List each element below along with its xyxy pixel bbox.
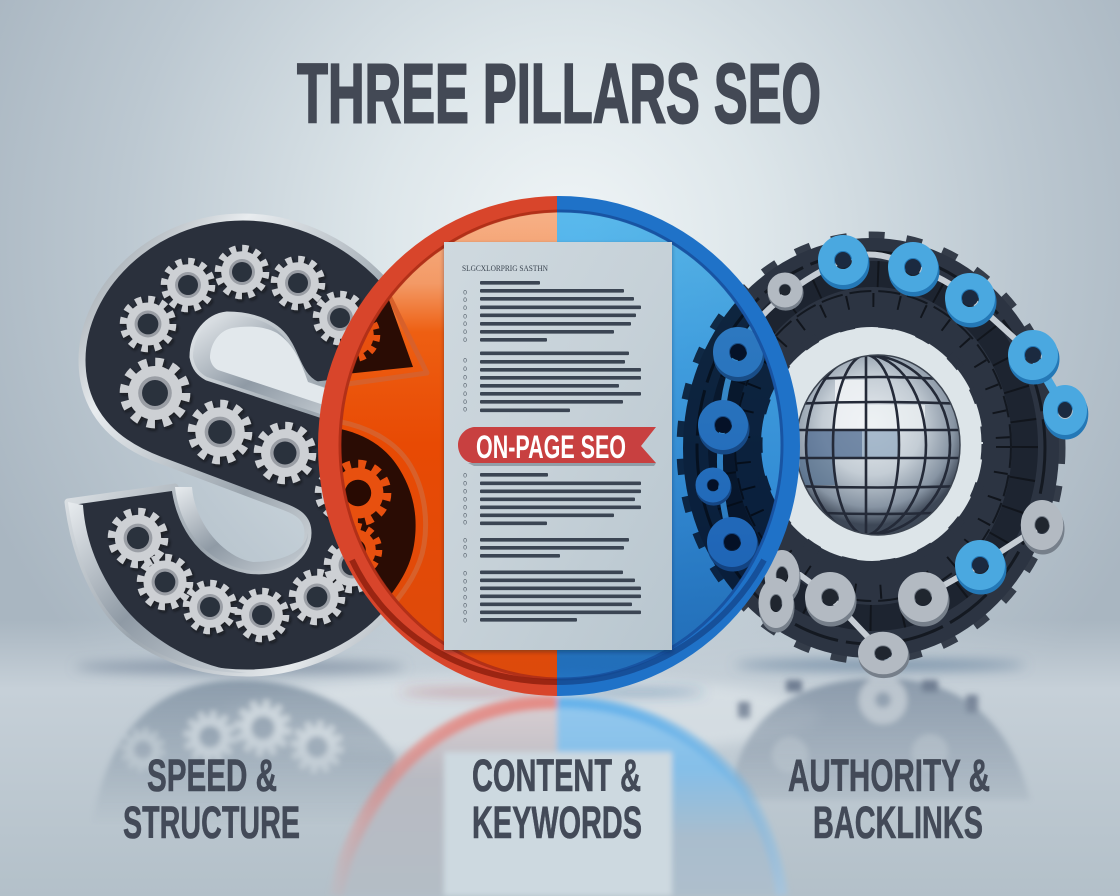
document bullet marks: 0 (463, 602, 467, 610)
orange lens half (341, 212, 557, 678)
reflection: central lens (336, 700, 782, 896)
document bullet marks: 0 (463, 366, 467, 373)
label: speed and structure: SPEED & (147, 750, 277, 801)
document bullet marks: 0 (463, 610, 467, 616)
ribbon: on-page seo: ON-PAGE SEO (476, 429, 626, 465)
document bullet marks: 0 (463, 594, 467, 602)
document bullet marks: 0 (463, 586, 467, 594)
reflection: S letter (100, 678, 396, 804)
globe (798, 354, 961, 536)
document bullet marks: 0 (463, 290, 467, 296)
lens rim: red (318, 196, 557, 696)
document bullet marks: 0 (463, 382, 467, 390)
floor contact shadows (75, 660, 1025, 695)
document bullet marks: 0 (463, 578, 467, 586)
document bullet marks: 0 (463, 618, 467, 624)
label: authority and backlinks (788, 750, 990, 848)
document bullet marks: 0 (463, 305, 467, 312)
document bullet marks: 0 (463, 358, 467, 364)
document bullet marks: 0 (463, 488, 467, 496)
gears in S (112, 249, 376, 638)
chain links: seen through lens (701, 335, 756, 563)
document bullet marks: 0 (463, 297, 467, 304)
document bullet marks: 0 (463, 337, 467, 344)
document bullet marks: 0 (463, 544, 467, 552)
reflection: link wheel (730, 678, 1030, 800)
ribbon: on-page seo (458, 427, 656, 466)
document bullet marks: 0 (463, 520, 467, 526)
document bullet marks: 0 (463, 496, 467, 504)
blue lens tint (557, 212, 781, 678)
label: speed and structure (123, 750, 300, 848)
document bullet marks: 0 (463, 504, 467, 512)
document bullet marks: 0 (463, 391, 467, 398)
document bullet marks: 0 (463, 480, 467, 488)
document bullet marks: 0 (463, 552, 467, 560)
document bullet marks (463, 290, 467, 624)
pillar two: central lens (318, 196, 800, 696)
label: speed and structure: STRUCTURE (123, 797, 300, 848)
white ring (761, 327, 983, 561)
document heading: SLGCXLORPRIG SASTHN (462, 264, 548, 273)
lower terminal bevel (68, 502, 247, 673)
document bullet marks: 0 (463, 329, 467, 336)
document bullet marks: 0 (463, 399, 467, 406)
document bullet marks: 0 (463, 406, 467, 414)
document bullet marks: 0 (463, 472, 467, 480)
tyre teeth (680, 235, 1062, 661)
label: authority and backlinks: BACKLINKS (813, 797, 983, 848)
document bullet marks: 0 (463, 374, 467, 382)
document page (444, 242, 672, 650)
chain links: grey (764, 278, 1057, 671)
pillar one: S letter with gears (68, 217, 427, 673)
chain links: blue (826, 243, 1081, 586)
document bullet marks: 0 (463, 570, 467, 578)
document bullet marks: 0 (463, 538, 467, 544)
upper counter opening (210, 327, 345, 412)
label: content and keywords: KEYWORDS (472, 797, 642, 848)
upper counter bevel (193, 315, 345, 422)
label: content and keywords: CONTENT & (472, 750, 641, 801)
document text lines (480, 281, 641, 622)
lens rim: blue (557, 196, 800, 696)
pillar three: chain link wheel with globe (680, 235, 1081, 671)
document bullet marks: 0 (463, 512, 467, 520)
tyre body (683, 238, 1059, 658)
label: authority and backlinks: AUTHORITY & (788, 750, 990, 801)
upper S fragment through lens (340, 296, 427, 385)
lower S fragment through lens (342, 420, 428, 602)
document bullet marks: 0 (463, 321, 467, 328)
lower counter bevel (175, 487, 308, 571)
document bullet marks: 0 (463, 314, 467, 320)
chain rods (720, 254, 1065, 653)
label: content and keywords (472, 750, 642, 848)
